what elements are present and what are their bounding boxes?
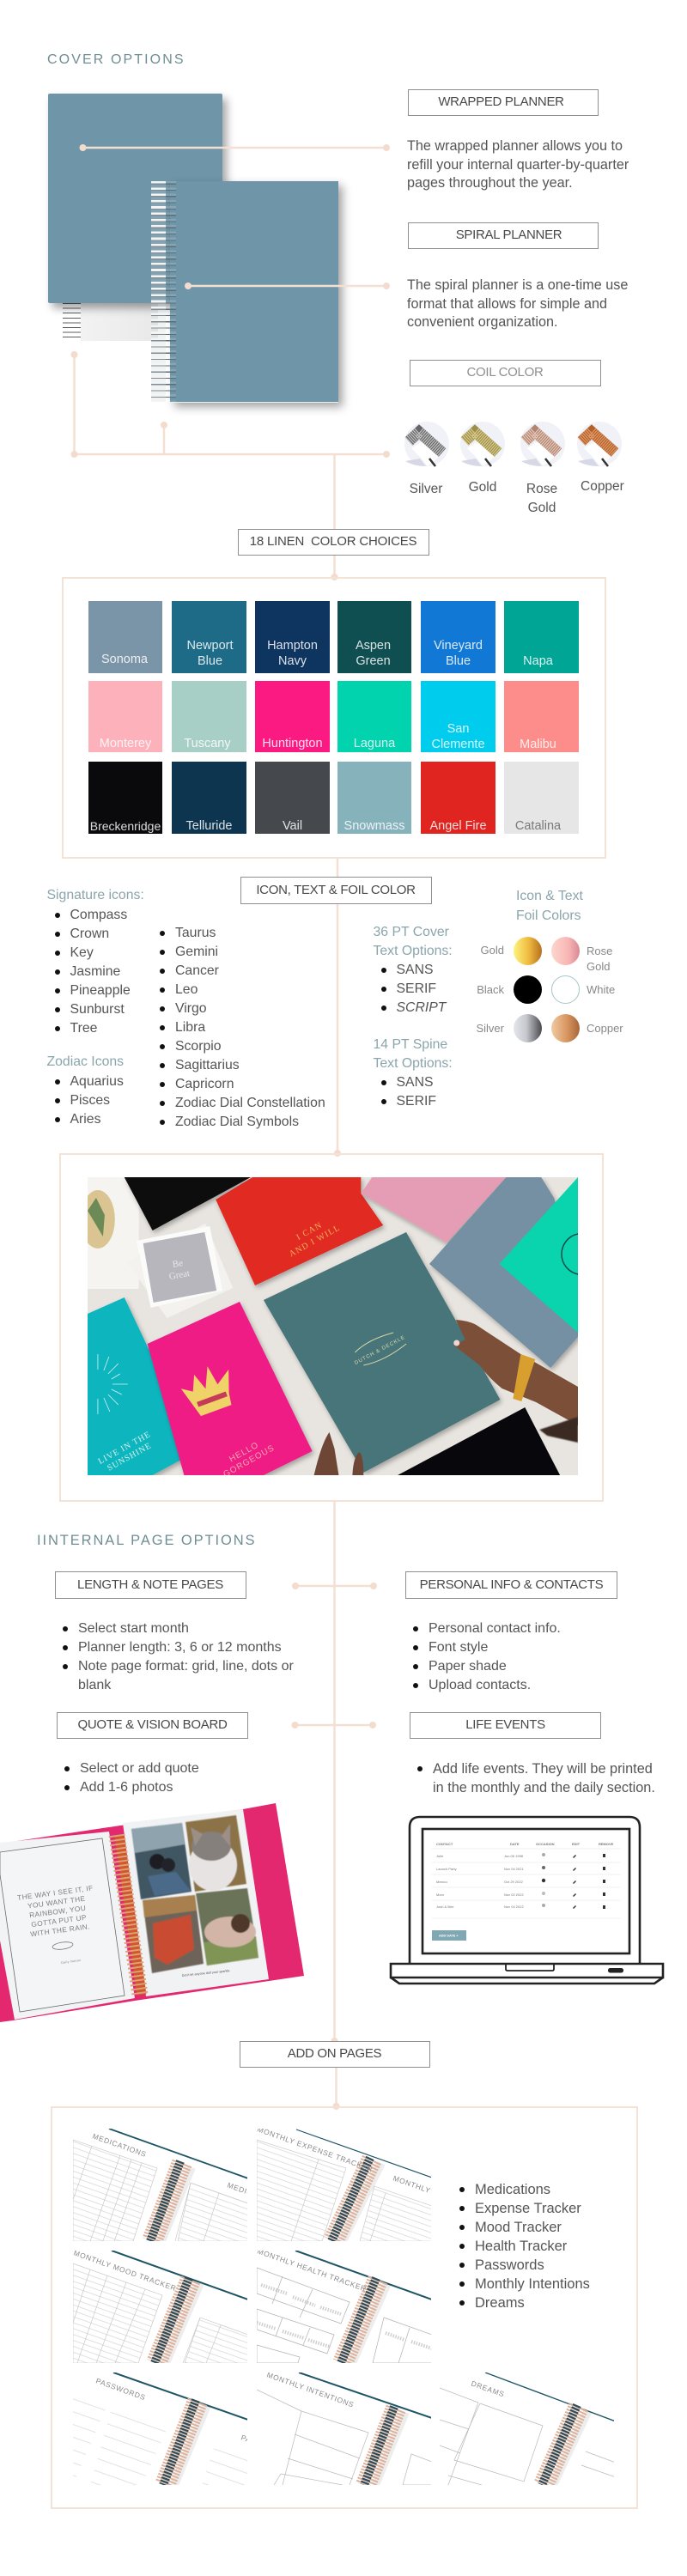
label: length and note pages [55, 1571, 246, 1599]
foil circle: copper [551, 1014, 580, 1042]
swatch: Sonoma: Sonoma [101, 653, 148, 666]
heading: icon and text foil colors: Foil Colors [516, 908, 581, 923]
swatch: Aspen Green: Green [356, 654, 391, 668]
list: personal info and contacts: Font style [429, 1640, 488, 1655]
label: spiral planner: SPIRAL PLANNER [456, 228, 562, 242]
list: length and note pages: blank [78, 1678, 111, 1692]
quote text: GOTTA PUT UP [31, 1913, 87, 1929]
list: zodiac icons continued: Zodiac Dial Constellation [175, 1096, 325, 1110]
list: zodiac icons continued: Zodiac Dial Symbols [175, 1115, 299, 1129]
list: spine text options: SERIF [397, 1094, 436, 1109]
heading: icon and text foil colors [516, 889, 583, 923]
list: zodiac icons continued: Leo [175, 982, 198, 997]
photo: open planner with quote and vision board [0, 1803, 304, 2022]
cyan cover: SUNSHINE [106, 1441, 154, 1473]
swatch: Monterey [88, 681, 162, 752]
text: spiral planner description [407, 277, 628, 330]
swatch: Huntington [255, 681, 330, 752]
list: zodiac icons: Aquarius [70, 1074, 124, 1089]
list: signature icons: Tree [70, 1021, 97, 1036]
heading: icon and text foil colors: Icon & Text [516, 889, 583, 903]
table: EDIT [572, 1842, 581, 1846]
photo cards: Be [172, 1258, 184, 1270]
foil label: rose gold: Gold [587, 960, 610, 973]
foil label: copper: Copper [587, 1022, 623, 1035]
list: add on pages: Medications [475, 2182, 550, 2197]
table: Julie [436, 1854, 444, 1858]
swatch: Laguna [337, 681, 411, 752]
heading: signature icons: Signature icons: [46, 888, 144, 902]
label: personal info and contacts: PERSONAL INFO & CONTACTS [420, 1577, 603, 1592]
label: life events [410, 1712, 601, 1739]
pink cover [361, 1177, 506, 1242]
swatch: Vineyard Blue: Blue [446, 654, 471, 668]
list: add on pages: Monthly Intentions [475, 2276, 590, 2292]
label: length and note pages: LENGTH & NOTE PAGES [77, 1577, 223, 1592]
swatch: Newport Blue: Blue [198, 654, 222, 668]
label: quote and vision board [57, 1712, 248, 1739]
coil label: silver: Silver [410, 482, 442, 496]
swatch: Angel Fire: Angel Fire [429, 819, 487, 833]
list: zodiac icons continued [160, 926, 325, 1129]
pink cover [0, 1803, 304, 2022]
list: zodiac icons continued: Scorpio [175, 1039, 222, 1054]
text: wrapped planner description: refill your internal quarter-by-quarter [407, 156, 629, 172]
list: quote and vision board [64, 1761, 199, 1795]
thumbnail: monthly mood tracker [73, 2251, 247, 2363]
coil color swatches [404, 422, 622, 467]
list: signature icons: Key [70, 945, 94, 960]
add date button [432, 1930, 466, 1941]
panel: planner cover photo [59, 1153, 604, 1502]
cyan cover: LIVE IN THE [97, 1430, 153, 1467]
list: life events [417, 1761, 655, 1795]
coil label: copper: Copper [581, 479, 624, 494]
cyan cover [68, 1297, 197, 1475]
label: 18 linen color choices [237, 529, 429, 556]
table: Nov 04 2022 [504, 1905, 524, 1909]
list: personal info and contacts: Personal contact info. [429, 1621, 561, 1636]
list: signature icons [55, 908, 131, 1036]
photo: cat [185, 1815, 246, 1892]
spiral binding [117, 1835, 142, 1995]
swatch: San Clemente: San [447, 722, 469, 736]
wrapped coil [63, 303, 81, 341]
list: personal info and contacts: Upload contacts. [429, 1678, 531, 1692]
list: personal info and contacts [413, 1621, 561, 1692]
hot pink cover [148, 1302, 313, 1479]
swatch: Laguna: Laguna [354, 737, 395, 750]
label: 18 linen color choices: 18 LINEN COLOR CHOICES [250, 534, 416, 549]
swatch: Vineyard Blue: Vineyard [434, 639, 483, 653]
quote text: YOU WANT THE [27, 1894, 86, 1910]
label: add on pages: ADD ON PAGES [288, 2046, 381, 2061]
swatch: Angel Fire [421, 762, 495, 834]
coil label: rose gold: Gold [528, 501, 556, 515]
list: cover text options: SCRIPT [397, 1000, 446, 1015]
coil label: rose gold [526, 482, 557, 515]
list: length and note pages: Planner length: 3, 6 or 12 months [78, 1640, 282, 1655]
thumbnail: passwords: PASSWORDS [94, 2376, 147, 2402]
list: quote and vision board: Select or add quote [80, 1761, 199, 1776]
foil label: gold: Gold [481, 944, 504, 957]
swatch: San Clemente [421, 681, 495, 752]
swatch: Sonoma [88, 601, 162, 673]
bowl [81, 1190, 115, 1249]
text: wrapped planner description [407, 138, 629, 191]
laptop indicator [608, 1968, 623, 1973]
thumbnail: dreams: DREAMS [470, 2379, 506, 2398]
table: Josh & Brie [436, 1905, 454, 1909]
table: REMOVE [599, 1842, 614, 1846]
icon: copper coil [577, 422, 622, 466]
thumbnail: monthly intentions [257, 2372, 431, 2485]
list: zodiac icons continued: Capricorn [175, 1077, 234, 1091]
list: zodiac icons continued: Taurus [175, 926, 216, 940]
quote text: Daily Nation [61, 1959, 82, 1965]
swatch: San Clemente: Clemente [431, 738, 485, 751]
swatch: Catalina: Catalina [515, 819, 561, 833]
swatch: Catalina [504, 762, 579, 834]
table: Oct 29 2022 [504, 1880, 524, 1884]
swatch: Vineyard Blue [421, 601, 495, 673]
label: wrapped planner [407, 89, 598, 116]
swatch: Newport Blue: Newport [187, 639, 234, 653]
list: zodiac icons continued: Gemini [175, 945, 218, 959]
swatch: Huntington: Huntington [262, 737, 323, 750]
list: add on pages: Expense Tracker [475, 2201, 581, 2216]
text: spiral planner description: The spiral planner is a one-time use [407, 277, 628, 293]
wrapped cover [48, 94, 222, 303]
wrapped planner image [46, 93, 232, 341]
foil label: rose gold: Rose [587, 945, 612, 957]
swatch: Vail: Vail [283, 819, 302, 833]
laguna cover [499, 1177, 578, 1333]
swatch: Breckenridge [88, 762, 162, 834]
table: Nov 04 2021 [504, 1867, 524, 1871]
left page [0, 1832, 135, 2020]
spiral cover [170, 181, 338, 403]
photo: planner covers flat lay [88, 1177, 578, 1475]
quote text [16, 1883, 102, 1969]
list: spine text options [381, 1075, 436, 1109]
icon: silver coil [404, 422, 449, 466]
list: add on pages: Health Tracker [475, 2239, 567, 2254]
caption: Don't let anyone dull your sparkle. [182, 1969, 231, 1978]
list: spine text options: SANS [397, 1075, 434, 1090]
list: zodiac icons: Pisces [70, 1093, 110, 1108]
list: signature icons: Compass [70, 908, 127, 922]
laptop body [391, 1817, 663, 1984]
foil color chart [476, 937, 623, 1042]
swatch: Malibu: Malibu [520, 738, 556, 751]
label: add on pages [239, 2041, 429, 2068]
list: length and note pages: Note page format: grid, line, dots or [78, 1659, 294, 1674]
text: spiral planner description: convenient organization. [407, 314, 558, 330]
swatch: Vail [255, 762, 330, 834]
foil label: black: Black [477, 983, 504, 996]
coil label: rose gold: Rose [526, 482, 557, 496]
panel: add on pages [51, 2106, 638, 2509]
label: wrapped planner: WRAPPED PLANNER [438, 94, 564, 109]
quote text: THE WAY I SEE IT, IF [16, 1883, 94, 1902]
list: life events: Add life events. They will be printed [433, 1761, 653, 1777]
left hand [314, 1432, 363, 1475]
swatch: Aspen Green: Aspen [356, 639, 391, 653]
foil label: white: White [587, 983, 615, 996]
table: OCCASION [536, 1842, 555, 1846]
swatch: Hampton Navy: Navy [278, 654, 307, 668]
photo: friends on mountain [131, 1823, 192, 1899]
swatch: Snowmass: Snowmass [344, 819, 404, 833]
table: Launch Party [436, 1867, 457, 1871]
label: icon text and foil color [240, 877, 431, 904]
swatch: Snowmass [337, 762, 411, 834]
label: personal info and contacts [405, 1571, 617, 1599]
list: zodiac icons continued: Cancer [175, 963, 219, 978]
foil circle: gold [514, 937, 542, 965]
list: zodiac icons continued: Libra [175, 1020, 205, 1035]
grey blue cover [429, 1177, 578, 1368]
icon: rose gold coil [520, 422, 565, 466]
heading: zodiac icons: Zodiac Icons [46, 1054, 124, 1069]
label: spiral planner [407, 222, 598, 249]
heading: 36 pt cover text options: 36 PT Cover [373, 925, 449, 939]
list: zodiac icons [55, 1074, 124, 1127]
heading: internal page options: IINTERNAL PAGE OPTIONS [37, 1533, 256, 1548]
photo cards [127, 1224, 233, 1318]
swatch: Hampton Navy: Hampton [267, 639, 318, 653]
thumbnail: dreams [440, 2372, 614, 2485]
swatch: Napa [504, 601, 579, 673]
heading: cover options: COVER OPTIONS [47, 52, 185, 67]
thumbnail: passwords [73, 2372, 247, 2485]
heading: 36 pt cover text options [373, 925, 453, 958]
swatch: Hampton Navy [255, 601, 330, 673]
photo: group in red [143, 1895, 204, 1973]
list: signature icons: Crown [70, 927, 109, 941]
foil circle: white [551, 975, 580, 1004]
label: quote and vision board: QUOTE & VISION BOARD [77, 1717, 228, 1732]
list: add on pages: Mood Tracker [475, 2220, 562, 2235]
thumbnail: medications [73, 2129, 247, 2241]
photo: friends on grass [196, 1888, 258, 1965]
table: DATE [510, 1842, 520, 1846]
list: cover text options: SERIF [397, 981, 436, 996]
text: spiral planner description: format that allows for simple and [407, 295, 607, 311]
label: coil color [409, 360, 601, 386]
heading: 36 pt cover text options: Text Options: [373, 944, 453, 958]
foil circle: rose gold [551, 937, 580, 965]
list: zodiac icons continued: Sagittarius [175, 1058, 240, 1072]
thumbnail: monthly expense tracker [257, 2129, 431, 2241]
table: Mexico [436, 1880, 447, 1884]
thumbnail: medications: MEDICATIONS [91, 2131, 148, 2159]
list: add on pages: Dreams [475, 2295, 525, 2311]
dark teal cover [264, 1232, 500, 1473]
black cover top [125, 1177, 251, 1230]
black cover bottom [398, 1407, 560, 1475]
table: Mom [436, 1893, 445, 1897]
list: length and note pages [63, 1621, 294, 1692]
table: Jun 05 1998 [504, 1854, 524, 1858]
list: signature icons: Sunburst [70, 1002, 125, 1017]
thumbnail: monthly health tracker [257, 2251, 431, 2363]
table [436, 1842, 614, 1909]
list: signature icons: Pineapple [70, 983, 131, 998]
swatch: Tuscany [172, 681, 246, 752]
right page [123, 1809, 269, 1996]
red cover: I CAN [295, 1220, 324, 1242]
add date button: ADD DATE + [439, 1934, 459, 1937]
quote text: RAINBOW, YOU [29, 1904, 87, 1919]
foil circle: black [514, 975, 542, 1004]
red cover [216, 1177, 383, 1285]
table: CONTACT [436, 1842, 453, 1846]
text: wrapped planner description: pages throughout the year. [407, 175, 573, 191]
foil label: silver: Silver [476, 1022, 504, 1035]
swatch: Breckenridge: Breckenridge [90, 819, 161, 833]
spiral planner image [151, 180, 349, 412]
heading: 14 pt spine text options: 14 PT Spine [373, 1037, 447, 1052]
list: life events: in the monthly and the daily section. [433, 1780, 655, 1795]
list: quote and vision board: Add 1-6 photos [80, 1780, 173, 1795]
swatch: Aspen Green [337, 601, 411, 673]
label: coil color: COIL COLOR [467, 365, 543, 380]
swatch: Telluride [172, 762, 246, 834]
list: zodiac icons continued: Virgo [175, 1001, 207, 1016]
coil label: gold: Gold [469, 480, 496, 495]
panel: linen color swatches [62, 577, 606, 859]
refill pages under wrapped cover [81, 303, 158, 341]
swatch: Telluride: Telluride [185, 819, 232, 833]
spiral coil [151, 181, 176, 402]
foil label: rose gold [587, 945, 612, 973]
illustration: laptop with life events table [390, 1815, 665, 1985]
hot pink cover: HELLO [228, 1440, 260, 1464]
icon: gold coil [460, 422, 505, 466]
list: cover text options [381, 963, 447, 1015]
heading: 14 pt spine text options: Text Options: [373, 1056, 453, 1071]
swatch: Newport Blue [172, 601, 246, 673]
swatch: Napa: Napa [523, 654, 553, 668]
dark teal cover: DUTCH & DECKLE [354, 1335, 406, 1366]
foil circle: silver [514, 1014, 542, 1042]
photo cards: Great [168, 1268, 191, 1282]
table: Nov 02 2022 [504, 1893, 524, 1897]
label: icon text and foil color: ICON, TEXT & FOIL COLOR [256, 883, 416, 897]
heading: 14 pt spine text options [373, 1037, 453, 1071]
list: cover text options: SANS [397, 963, 434, 977]
list: add on pages: Passwords [475, 2257, 544, 2273]
list: personal info and contacts: Paper shade [429, 1659, 507, 1674]
red cover: AND I WILL [288, 1223, 342, 1259]
hand and bracelet [453, 1320, 578, 1425]
quote text: WITH THE RAIN. [30, 1922, 90, 1938]
label: life events: LIFE EVENTS [465, 1717, 545, 1732]
list: length and note pages: Select start month [78, 1621, 189, 1636]
list: signature icons: Jasmine [70, 964, 120, 979]
swatch: Monterey: Monterey [100, 737, 151, 750]
list: zodiac icons: Aries [70, 1112, 101, 1127]
list: add on pages [459, 2182, 590, 2311]
text: wrapped planner description: The wrapped planner allows you to [407, 138, 623, 154]
swatch: Tuscany: Tuscany [184, 737, 231, 750]
swatch: Malibu [504, 681, 579, 752]
